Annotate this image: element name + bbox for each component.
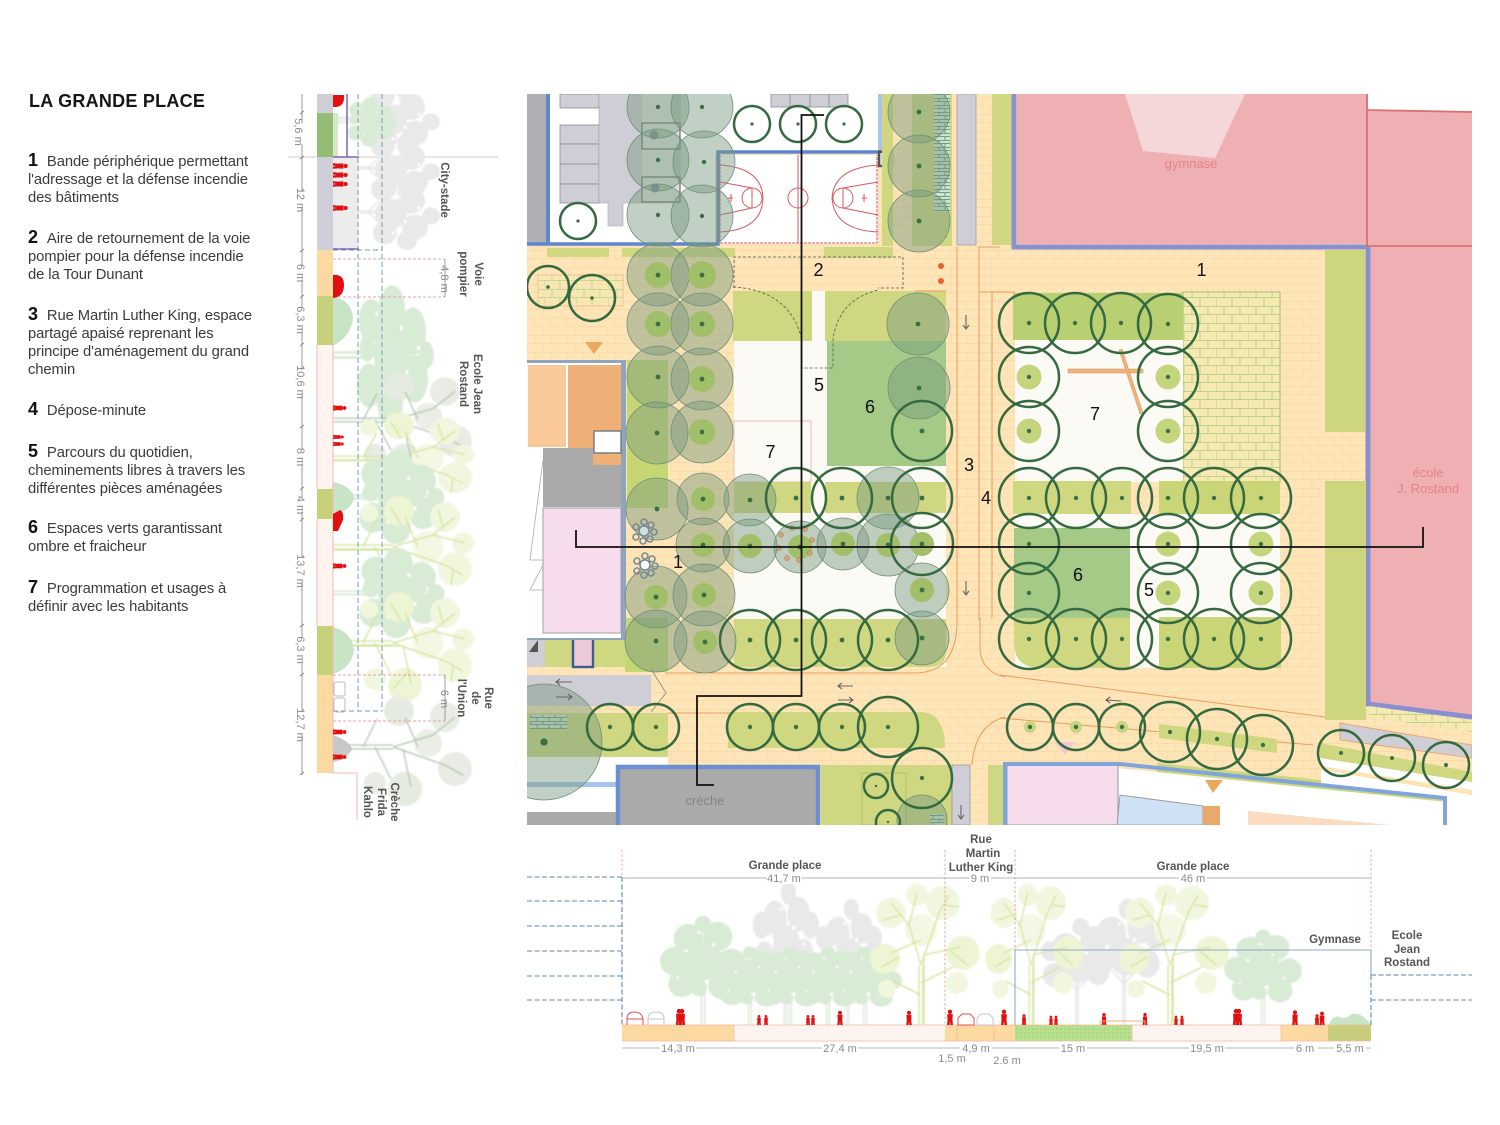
section place labels: Jean	[1394, 944, 1420, 956]
vertical section shrubs	[333, 113, 354, 762]
legend item 1: 1 Bande périphérique permettant	[28, 150, 248, 170]
vertical section place labels: Rue	[482, 687, 494, 709]
play structures	[633, 519, 658, 578]
vertical section parked cars	[334, 682, 345, 712]
legend item 2: de la Tour Dunant	[28, 267, 143, 283]
turning area dashed outline	[733, 257, 903, 368]
plan numbers	[673, 260, 1207, 600]
bottom-right buildings	[1005, 706, 1472, 825]
école J. Rostand building: école	[1412, 465, 1444, 480]
section trees	[660, 881, 1302, 1025]
section dimensions	[622, 873, 1371, 1067]
section dimensions: 27,4 m	[823, 1043, 857, 1055]
vertical section dimension axis	[292, 94, 450, 775]
crèche building	[618, 766, 818, 825]
section place labels	[749, 834, 1430, 969]
right square beds	[1013, 293, 1281, 668]
legend item 7: 7 Programmation et usages à	[28, 577, 226, 597]
panel: horizontal section	[527, 834, 1472, 1067]
vertical section dimension axis: 12,7 m	[294, 708, 306, 742]
vertical section horizon line	[288, 156, 498, 158]
vertical section place labels: Kahlo	[361, 786, 373, 818]
title: LA GRANDE PLACE	[29, 91, 205, 111]
section dimensions: 1,5 m	[938, 1053, 966, 1065]
paving street curbs	[665, 247, 1325, 765]
benches	[1068, 349, 1143, 414]
école J. Rostand building	[1367, 94, 1472, 717]
panel: site plan	[486, 76, 1472, 845]
section dimensions: 9 m	[971, 873, 989, 885]
section place labels: Martin	[966, 848, 1000, 860]
vertical section ground strip	[317, 94, 358, 820]
section place labels: Grande place	[1157, 861, 1229, 873]
panel: vertical section	[288, 82, 498, 821]
legend item 2	[28, 227, 250, 283]
legend item 1: des bâtiments	[28, 190, 119, 206]
section place labels: Luther King	[949, 862, 1013, 874]
legend item 6	[28, 517, 222, 555]
vertical section trees	[333, 82, 474, 806]
section dimensions: 5,5 m	[1336, 1043, 1364, 1055]
section people	[676, 1009, 1325, 1025]
vertical section place labels: de	[469, 691, 481, 705]
plan numbers: 4	[981, 488, 991, 508]
plan numbers: 3	[964, 455, 974, 475]
legend item 5: cheminements libres à travers les	[28, 463, 245, 479]
legend item 1	[28, 150, 248, 206]
vertical section place labels: City-stade	[438, 162, 450, 218]
plan numbers: 2	[813, 260, 824, 280]
vertical section place labels: l'Union	[455, 679, 467, 717]
plan numbers: 6	[1073, 565, 1083, 585]
section dimensions: 4,9 m	[962, 1043, 990, 1055]
panel: legend	[28, 91, 252, 615]
tree trunk dots	[540, 105, 1448, 823]
vertical section place labels: Rostand	[457, 361, 469, 407]
seating around central tree	[776, 526, 814, 562]
section dimensions: 14,3 m	[661, 1043, 695, 1055]
legend item 5: différentes pièces aménagées	[28, 481, 222, 497]
legend item 2: 2 Aire de retournement de la voie	[28, 227, 250, 247]
section building lines	[527, 850, 1472, 1025]
left planting strip	[625, 360, 668, 672]
vertical section dimension axis: 6,3 m	[294, 636, 306, 664]
section ground	[622, 1025, 1371, 1041]
green paved panel	[1183, 292, 1280, 482]
legend item 5	[28, 441, 245, 497]
crèche building: crèche	[685, 793, 725, 808]
traffic arrows	[556, 315, 1121, 819]
vertical section dimension axis: 6 m	[294, 264, 306, 282]
legend item 3: principe d'aménagement du grand	[28, 344, 249, 360]
new tree rings	[527, 106, 1469, 834]
vertical section dimension axis: 6 m	[438, 690, 450, 708]
legend item 3	[28, 304, 252, 378]
legend item 2: pompier pour la défense incendie	[28, 249, 244, 265]
centre-left beds	[733, 291, 946, 667]
legend item 3: 3 Rue Martin Luther King, espace	[28, 304, 252, 324]
section vehicles and benches	[627, 1012, 1145, 1025]
bottom centre garden	[821, 765, 1004, 825]
section place labels: Grande place	[749, 860, 821, 872]
legend item 6: 6 Espaces verts garantissant	[28, 517, 222, 537]
section place labels: Rue	[970, 834, 992, 846]
legend item 7	[28, 577, 226, 615]
gymnase building: gymnase	[1165, 156, 1217, 171]
vertical section dimension axis: 4,8 m	[438, 265, 450, 293]
plan numbers: 7	[765, 442, 776, 462]
école J. Rostand building: J. Rostand	[1397, 481, 1459, 496]
vertical section place labels: pompier	[457, 251, 469, 297]
vertical section dimension axis: 12 m	[294, 188, 306, 212]
legend item 4: 4 Dépose-minute	[28, 399, 146, 419]
legend item 3: chemin	[28, 362, 75, 378]
section dimensions: 46 m	[1181, 873, 1205, 885]
school building left	[527, 360, 626, 640]
street grey lane	[957, 94, 976, 245]
legend item 7: définir avec les habitants	[28, 599, 188, 615]
legend item 1: l'adressage et la défense incendie	[28, 172, 248, 188]
section place labels: Rostand	[1384, 957, 1430, 969]
top strips of planting	[547, 94, 1012, 258]
vertical section dimension axis: 10,6 m	[294, 365, 306, 399]
plan numbers: 1	[1196, 260, 1207, 280]
inner planting disks	[644, 261, 1274, 733]
right planting strips	[1325, 250, 1366, 720]
orange entrance marker	[585, 342, 603, 354]
basketball court	[720, 152, 892, 244]
section dimensions: 6 m	[1296, 1043, 1314, 1055]
plan paving ground	[527, 94, 1472, 825]
vertical section place labels	[361, 162, 494, 822]
plan numbers: 5	[1144, 580, 1154, 600]
vertical section place labels: Voie	[472, 262, 484, 286]
vertical section people	[333, 95, 348, 760]
vertical section dimension axis: 6,3 m	[294, 306, 306, 334]
section dimensions: 41,7 m	[767, 873, 801, 885]
section dimensions: 19,5 m	[1190, 1043, 1224, 1055]
green hatch wall	[934, 94, 950, 212]
plan numbers: 7	[1090, 404, 1100, 424]
small paved tree plots	[538, 275, 623, 306]
section place labels: Ecole	[1392, 930, 1422, 942]
section dimensions: 15 m	[1061, 1043, 1085, 1055]
section dimensions: 2.6 m	[993, 1055, 1021, 1067]
section cut lines	[576, 115, 1423, 785]
vertical section place labels: Ecole Jean	[471, 354, 483, 414]
shrubs	[1329, 1014, 1371, 1025]
vertical section building lines	[333, 94, 445, 721]
fire lane dots	[938, 263, 944, 284]
plan numbers: 6	[865, 397, 875, 417]
building: top-left courtyard	[527, 94, 880, 244]
vertical section dimension axis: 8 m	[294, 448, 306, 466]
gymnase building	[1014, 94, 1369, 247]
plan numbers: 5	[814, 375, 824, 395]
vertical section place labels: Frida	[375, 788, 387, 817]
plan numbers: 1	[673, 552, 683, 572]
existing tree crowns (translucent)	[527, 94, 950, 825]
vertical section dimension axis: 4 m	[294, 496, 306, 514]
legend item 5: 5 Parcours du quotidien,	[28, 441, 193, 461]
legend item 3: partagé apaisé reprenant les	[28, 326, 214, 342]
vertical section dimension axis: 13,7 m	[294, 554, 306, 588]
vertical section place labels: Crèche	[388, 782, 400, 822]
vertical section dimension axis: 5,6 m	[292, 118, 304, 146]
bottom-left road and garden	[527, 637, 945, 825]
legend item 6: ombre et fraicheur	[28, 539, 146, 555]
section place labels: Gymnase	[1309, 934, 1361, 946]
